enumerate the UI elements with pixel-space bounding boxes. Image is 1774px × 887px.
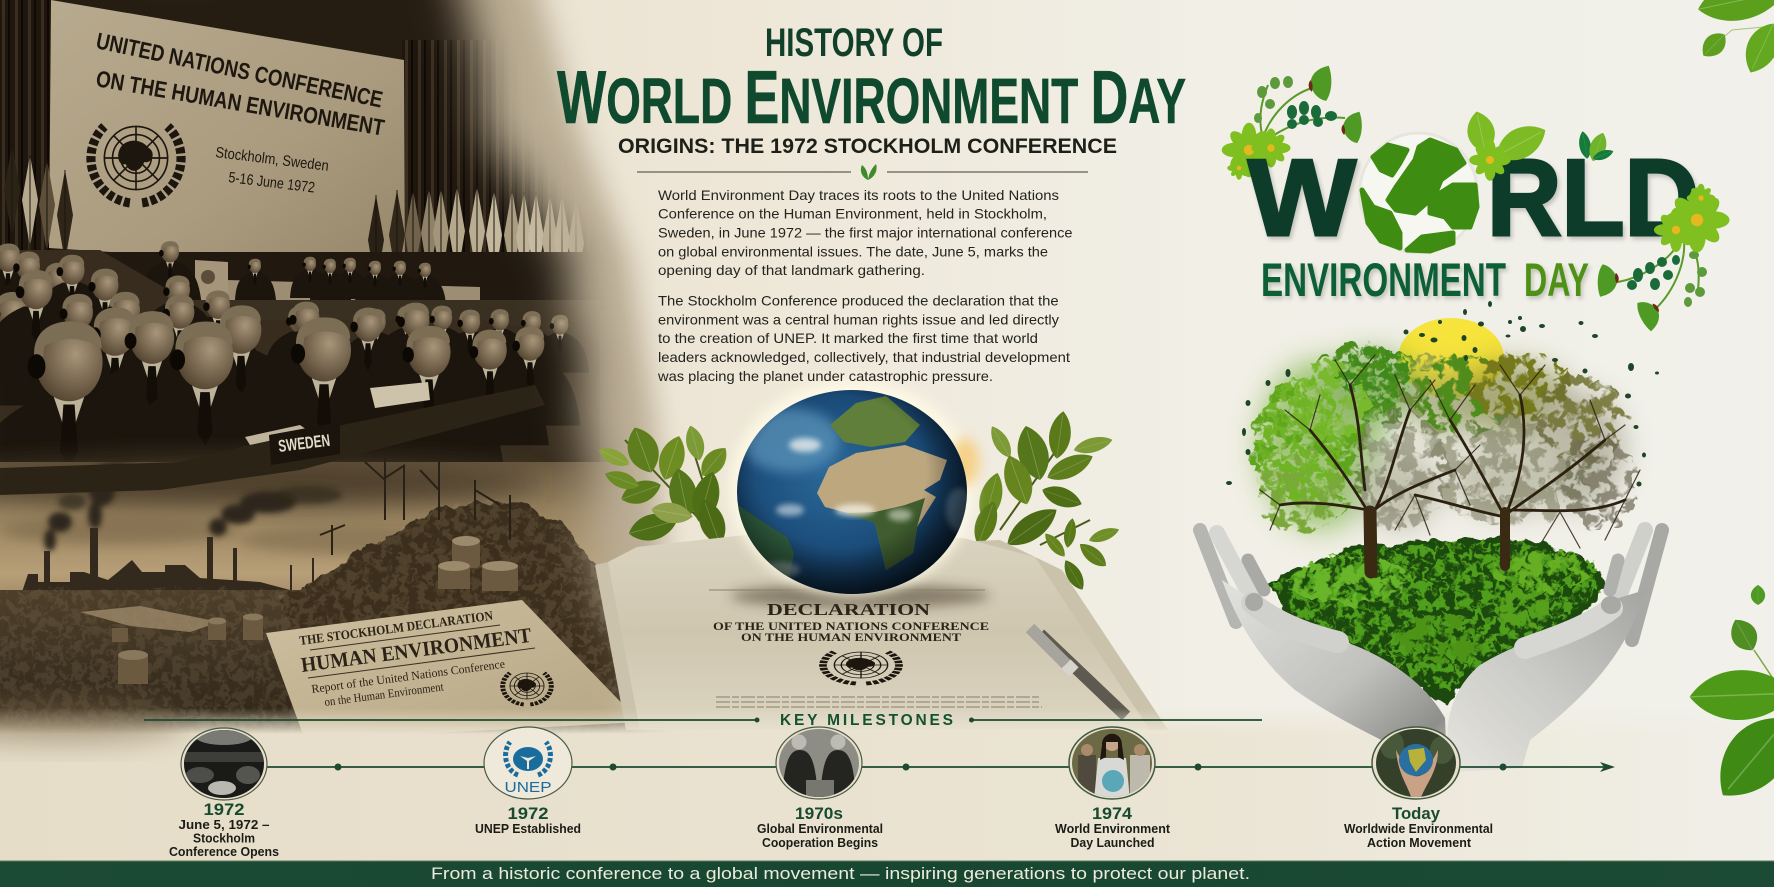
milestone 4: 1974 first WED — [1055, 725, 1171, 850]
illustration: cupped right hand — [1447, 530, 1662, 772]
tree canopy soft base — [1258, 352, 1624, 530]
illustration: moss island in hands — [1267, 537, 1608, 708]
logo leaves above letters — [1463, 109, 1615, 181]
factory skyline — [22, 528, 314, 590]
dead trees and stumps — [112, 455, 518, 684]
milestone caption: Action Movement — [1367, 836, 1472, 850]
milestone caption: June 5, 1972 – — [178, 818, 270, 832]
text block: first paragraph: on global environmental issues. The date, June 5, marks the — [658, 243, 1048, 259]
illustration: earth globe — [730, 380, 979, 596]
stage and delegates — [111, 241, 582, 300]
declaration subheading: OF THE UNITED NATIONS CONFERENCE — [713, 619, 989, 633]
logo letter W: W — [1248, 137, 1356, 259]
title: History of: HISTORY OF — [765, 21, 943, 65]
icon: fountain pen — [1030, 628, 1126, 716]
milestone caption: Worldwide Environmental — [1344, 822, 1493, 836]
audience rows — [0, 244, 590, 462]
illustration: leaves behind globe, right — [969, 410, 1121, 593]
logo words Environment Day: ENVIRONMENT — [1261, 253, 1506, 306]
text block: second paragraph: to the creation of UNEP. It marked the first time that world — [658, 330, 1038, 346]
subtitle: origins: ORIGINS: THE 1972 STOCKHOLM CONFERENCE — [618, 135, 1117, 158]
heading: key milestones — [144, 712, 1262, 729]
milestone year: 1972 — [508, 804, 548, 823]
logo flora left — [1222, 66, 1362, 180]
footer tagline: From a historic conference to a global movement — inspiring generations to protect our planet. — [431, 865, 1250, 883]
milestone 1: June 5 1972 — [169, 725, 279, 859]
milestone caption: UNEP Established — [475, 822, 581, 836]
tree canopy: right, fading — [1417, 351, 1636, 530]
logo words Environment Day: DAY — [1524, 253, 1589, 306]
divider with leaf — [637, 164, 1088, 180]
banner location and date — [216, 147, 328, 192]
declaration subheading — [713, 619, 989, 644]
heading: key milestones: KEY MILESTONES — [780, 712, 953, 729]
text block: second paragraph: was placing the planet under catastrophic pressure. — [657, 368, 993, 384]
medallion: UNEP logo: UNEP — [504, 779, 552, 796]
milestone year: 1972 — [204, 800, 244, 819]
text block: first paragraph: Sweden, in June 1972 — the first major international conference — [658, 224, 1073, 240]
text block: second paragraph: leaders acknowledged, collectively, that industrial development — [658, 349, 1070, 365]
milestone year: Today — [1392, 804, 1441, 823]
illustration: drifting leaf particles — [1226, 301, 1659, 486]
tree trunks — [1370, 512, 1505, 572]
smoke plumes — [44, 462, 342, 551]
text block: first paragraph: World Environment Day traces its roots to the United Nations — [658, 187, 1059, 203]
banner location and date: 5-16 June 1972 — [228, 169, 316, 197]
milestone caption: Conference Opens — [169, 845, 279, 859]
milestone caption — [169, 818, 279, 859]
desk and SWEDEN nameplate — [0, 382, 545, 495]
text block: second paragraph: environment was a central human rights issue and led directly — [658, 312, 1059, 328]
footer banner — [0, 861, 1774, 887]
milestone 3: 1970s cooperation — [757, 725, 883, 850]
deforested ground — [0, 500, 620, 725]
lower scene: polluted sky — [0, 460, 640, 602]
icon: UN emblem on newspaper — [503, 673, 551, 704]
document: Stockholm Declaration newspaper: Report of the United Nations Conference — [311, 657, 506, 696]
lingering earth tone at lower left — [0, 702, 190, 742]
text block: first paragraph: opening day of that landmark gathering. — [658, 262, 925, 278]
decorative leaves: top right corner — [1694, 0, 1774, 79]
milestone caption — [1344, 822, 1493, 850]
illustration: leaves behind globe, left — [596, 422, 733, 549]
document: Stockholm Declaration newspaper: on the Human Environment — [324, 679, 445, 709]
milestone caption: Stockholm — [193, 832, 255, 846]
illustration: two trees with foliage — [1252, 343, 1640, 548]
title block — [557, 21, 1186, 180]
document: Stockholm Declaration newspaper — [266, 600, 640, 740]
milestone caption: World Environment — [1055, 822, 1171, 836]
icon: UN emblem on banner — [91, 126, 181, 203]
medallion photo: two delegates — [775, 725, 865, 805]
desk and SWEDEN nameplate: SWEDEN — [277, 431, 331, 456]
logo letters RLD: RLD — [1487, 137, 1699, 259]
milestone caption: Global Environmental — [757, 822, 883, 836]
logo: World Environment Day — [1222, 66, 1730, 332]
icon: UN emblem on declaration — [823, 652, 899, 683]
banner heading: ON THE HUMAN ENVIRONMENT — [94, 65, 386, 141]
illustration: sun — [1398, 318, 1504, 398]
text block: first paragraph — [658, 187, 1073, 278]
milestone year: 1974 — [1092, 804, 1133, 823]
declaration subheading: ON THE HUMAN ENVIRONMENT — [741, 630, 961, 644]
document: Stockholm Declaration newspaper: THE STOCKHOLM DECLARATION — [298, 608, 494, 648]
logo flora right — [1598, 184, 1730, 332]
title: World Environment Day: WORLD ENVIRONMENT DAY — [557, 55, 1186, 139]
medallion photo: conference hall — [180, 725, 270, 805]
tree branches — [1260, 355, 1640, 548]
illustration: cupped left hand — [1200, 530, 1447, 772]
milestone caption: Day Launched — [1070, 836, 1154, 850]
milestone 2: UNEP established — [475, 727, 581, 836]
timeline axis with arrow — [224, 762, 1615, 772]
milestone year: 1970s — [795, 804, 843, 823]
text block: second paragraph: The Stockholm Conference produced the declaration that the — [658, 293, 1059, 309]
flags left group — [4, 150, 73, 250]
panel: 1972 conference and degradation photo collage — [0, 0, 654, 733]
bottom cream band — [0, 709, 1589, 860]
milestone 5: today — [1344, 725, 1493, 850]
flags right group — [368, 186, 584, 252]
logo globe — [1360, 133, 1478, 253]
milestone caption: Cooperation Begins — [762, 836, 878, 850]
milestone caption — [757, 822, 883, 850]
text block: first paragraph: Conference on the Human Environment, held in Stockholm, — [658, 206, 1047, 222]
medallion photo: activists — [1068, 725, 1158, 805]
milestone caption — [1055, 822, 1171, 850]
smoke haze behind left panel — [380, 0, 665, 690]
banner location and date: Stockholm, Sweden — [215, 144, 330, 175]
tree canopy: left, lush — [1252, 343, 1464, 534]
document: Declaration sheet — [595, 535, 1168, 730]
declaration heading: DECLARATION — [767, 600, 931, 619]
document: Stockholm Declaration newspaper: HUMAN ENVIRONMENT — [300, 623, 533, 677]
conference banner — [49, 0, 405, 271]
text block: second paragraph — [657, 293, 1070, 384]
decorative leaves: right edge — [1689, 585, 1774, 814]
medallion photo: hands holding earth — [1372, 725, 1462, 805]
banner heading: UNITED NATIONS CONFERENCE — [94, 27, 385, 113]
